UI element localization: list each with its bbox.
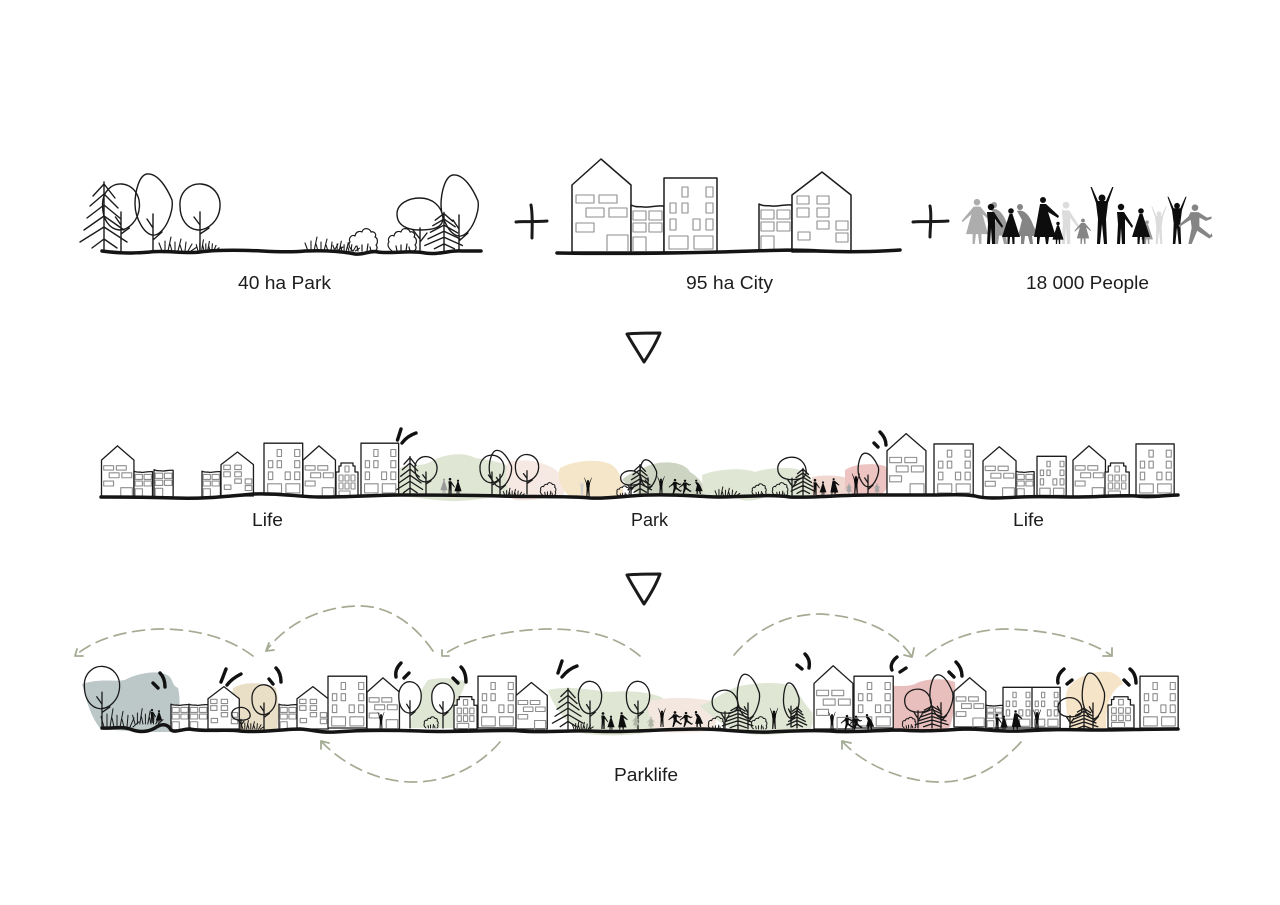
person xyxy=(1012,710,1022,730)
person xyxy=(962,199,991,244)
running person xyxy=(1178,204,1213,244)
person xyxy=(841,715,854,730)
tree xyxy=(640,460,657,494)
person xyxy=(378,712,384,729)
arrow: lower east xyxy=(842,741,1021,782)
colour blobs xyxy=(82,672,1123,735)
people in park xyxy=(440,473,880,497)
arrow: down triangle xyxy=(627,333,660,362)
apartment block xyxy=(1037,456,1066,497)
person xyxy=(987,204,1003,244)
circulation arrows xyxy=(75,606,1112,782)
central city xyxy=(454,676,547,729)
person xyxy=(695,711,703,727)
person xyxy=(440,479,448,493)
child xyxy=(1052,222,1064,244)
house xyxy=(208,687,239,729)
tree xyxy=(252,685,276,729)
person xyxy=(601,712,608,729)
narrow house xyxy=(1108,697,1134,728)
house xyxy=(983,447,1016,497)
tree xyxy=(905,689,931,728)
people among houses xyxy=(828,712,874,730)
person xyxy=(156,710,162,723)
person xyxy=(618,712,628,730)
tree xyxy=(858,453,879,495)
child xyxy=(845,483,852,494)
pine xyxy=(787,707,807,728)
person xyxy=(669,479,682,494)
label: Park: Park xyxy=(631,510,669,530)
grass xyxy=(159,237,197,251)
house xyxy=(303,446,335,497)
tree xyxy=(515,455,539,494)
person xyxy=(454,480,462,494)
grass xyxy=(241,721,264,729)
park xyxy=(397,450,879,496)
colour blobs xyxy=(398,454,889,501)
bush xyxy=(751,717,767,729)
pine xyxy=(791,468,814,495)
townhouse xyxy=(134,471,152,497)
person xyxy=(658,708,666,727)
bush xyxy=(752,484,766,495)
grass xyxy=(101,709,139,727)
house xyxy=(221,452,253,496)
tree xyxy=(480,455,504,496)
east houses xyxy=(1108,676,1178,728)
arrow: eastward outer xyxy=(926,629,1112,656)
arrow: westward outer xyxy=(75,629,253,656)
tree xyxy=(1082,673,1105,730)
activity ticks xyxy=(797,654,809,669)
plus sign xyxy=(913,206,948,237)
person xyxy=(695,480,703,494)
apartment block xyxy=(328,676,367,728)
person xyxy=(813,479,820,495)
person xyxy=(866,714,874,730)
tree xyxy=(103,184,139,252)
tree xyxy=(399,682,421,728)
left city xyxy=(102,443,399,497)
tree xyxy=(930,675,953,728)
apartment block xyxy=(664,178,717,252)
tree xyxy=(397,198,443,252)
house xyxy=(814,666,853,729)
townhouse xyxy=(202,471,220,497)
person xyxy=(151,709,156,723)
eastern city xyxy=(814,666,893,729)
person arms up xyxy=(1090,187,1114,244)
row 2: life and park side by side xyxy=(101,429,1178,530)
child xyxy=(873,483,880,494)
person xyxy=(579,481,585,496)
arrow: down triangle xyxy=(627,574,660,604)
person xyxy=(1017,204,1038,244)
pine tree xyxy=(80,182,127,252)
person xyxy=(991,202,1012,244)
narrow house xyxy=(1105,463,1129,497)
person xyxy=(830,478,839,495)
child xyxy=(632,716,640,728)
ground line xyxy=(557,250,900,253)
townhouse xyxy=(986,705,1003,728)
child xyxy=(1141,220,1153,244)
arrow: westward upper xyxy=(266,606,433,651)
people silhouettes xyxy=(962,187,1213,244)
grass xyxy=(715,487,740,496)
person xyxy=(584,478,592,497)
person arms up xyxy=(1151,206,1167,244)
grass xyxy=(572,721,593,729)
grass xyxy=(503,488,524,496)
ground line xyxy=(102,725,1178,732)
people among houses xyxy=(995,709,1041,730)
tree xyxy=(232,707,250,729)
label: 95 ha City: 95 ha City xyxy=(686,273,773,293)
house xyxy=(954,678,986,727)
activity ticks xyxy=(453,667,466,683)
activity ticks xyxy=(153,668,281,688)
person xyxy=(1002,208,1020,244)
bush xyxy=(617,486,629,496)
tree xyxy=(441,175,478,251)
arrow: eastward upper xyxy=(734,614,914,657)
tree xyxy=(180,184,220,252)
pocket park xyxy=(902,675,953,728)
tree xyxy=(135,174,172,250)
apartment block xyxy=(1003,687,1032,728)
green courtyard xyxy=(399,682,454,728)
bush xyxy=(540,483,556,495)
house xyxy=(102,446,134,497)
person xyxy=(1117,204,1133,244)
plus sign xyxy=(516,205,547,238)
people on hill xyxy=(151,709,162,723)
apartment block xyxy=(361,443,399,495)
tree xyxy=(489,450,512,496)
tree xyxy=(415,457,437,494)
apartment block xyxy=(1032,687,1060,728)
tree xyxy=(778,457,806,495)
bush xyxy=(349,229,377,251)
grass xyxy=(305,237,343,251)
pine xyxy=(552,688,583,729)
apartment block xyxy=(854,676,893,728)
townhouse xyxy=(1016,471,1034,497)
bush xyxy=(424,717,438,728)
person xyxy=(1034,197,1059,244)
label: Life: Life xyxy=(1013,510,1044,530)
person xyxy=(668,711,682,727)
person xyxy=(820,481,826,495)
house xyxy=(297,687,328,729)
pine xyxy=(628,465,652,494)
row 1: ingredients xyxy=(80,159,1213,293)
tree xyxy=(737,674,760,729)
townhouse xyxy=(189,704,208,730)
house xyxy=(367,678,399,729)
pine xyxy=(1070,708,1098,730)
townhouse xyxy=(279,704,297,730)
person xyxy=(607,716,615,730)
park xyxy=(552,674,807,729)
townhouse xyxy=(154,470,173,497)
apartment block xyxy=(934,444,973,495)
person xyxy=(680,712,693,727)
right city xyxy=(887,434,1174,497)
east city xyxy=(954,678,1060,728)
row 3: parklife xyxy=(82,654,1178,785)
ground line xyxy=(102,250,481,254)
label: Life: Life xyxy=(252,510,283,530)
person xyxy=(1000,716,1008,730)
apartment block xyxy=(1140,676,1178,728)
person xyxy=(1062,202,1079,244)
label: 18 000 People: 18 000 People xyxy=(1026,273,1149,293)
house xyxy=(792,172,851,252)
person xyxy=(679,480,691,494)
activity ticks xyxy=(891,657,1136,685)
bush xyxy=(708,717,724,729)
house xyxy=(516,682,547,729)
activity ticks xyxy=(558,661,577,677)
people in park xyxy=(601,708,778,730)
city sketch xyxy=(557,159,900,293)
ground line xyxy=(101,494,1178,498)
bush xyxy=(772,483,788,495)
person xyxy=(852,473,860,494)
bush xyxy=(388,229,416,251)
activity ticks xyxy=(396,663,409,678)
house xyxy=(572,159,631,252)
tree xyxy=(432,683,454,728)
east trees xyxy=(1058,673,1105,730)
person xyxy=(770,708,778,729)
person xyxy=(1132,208,1150,244)
person xyxy=(448,478,455,494)
label: 40 ha Park: 40 ha Park xyxy=(238,273,332,293)
townhouse xyxy=(631,205,664,252)
park sketch xyxy=(80,174,481,293)
arrow: lower west xyxy=(321,741,500,782)
tree xyxy=(783,683,799,727)
western city xyxy=(171,676,399,730)
person xyxy=(995,714,1002,730)
apartment block xyxy=(1136,444,1174,495)
pine xyxy=(915,706,948,728)
activity ticks xyxy=(398,429,416,443)
townhouse xyxy=(171,704,189,730)
apartment block xyxy=(478,676,516,728)
person xyxy=(828,712,836,730)
child xyxy=(647,717,655,729)
tree xyxy=(578,681,602,729)
house xyxy=(1073,446,1105,497)
person xyxy=(1033,709,1041,730)
grass xyxy=(333,241,360,251)
house xyxy=(887,434,926,495)
tree xyxy=(1058,698,1082,730)
tree xyxy=(712,690,738,729)
narrow house xyxy=(454,697,477,729)
townhouse xyxy=(759,204,792,251)
bush xyxy=(902,717,916,728)
person xyxy=(850,716,862,730)
arrow: westward centre xyxy=(442,629,640,656)
label: Parklife: Parklife xyxy=(614,765,678,785)
tree xyxy=(626,681,650,729)
apartment block xyxy=(264,443,303,495)
person arms up xyxy=(1167,197,1187,244)
west end: trees and hill xyxy=(84,666,163,729)
tree xyxy=(84,666,120,729)
pine xyxy=(397,456,423,495)
narrow house xyxy=(336,463,358,497)
pine xyxy=(722,706,753,729)
child xyxy=(1074,219,1091,244)
grass xyxy=(133,709,163,724)
pine tree xyxy=(425,212,462,251)
tree xyxy=(621,471,641,495)
activity ticks xyxy=(874,432,886,447)
grass xyxy=(196,240,219,251)
person xyxy=(657,476,665,495)
